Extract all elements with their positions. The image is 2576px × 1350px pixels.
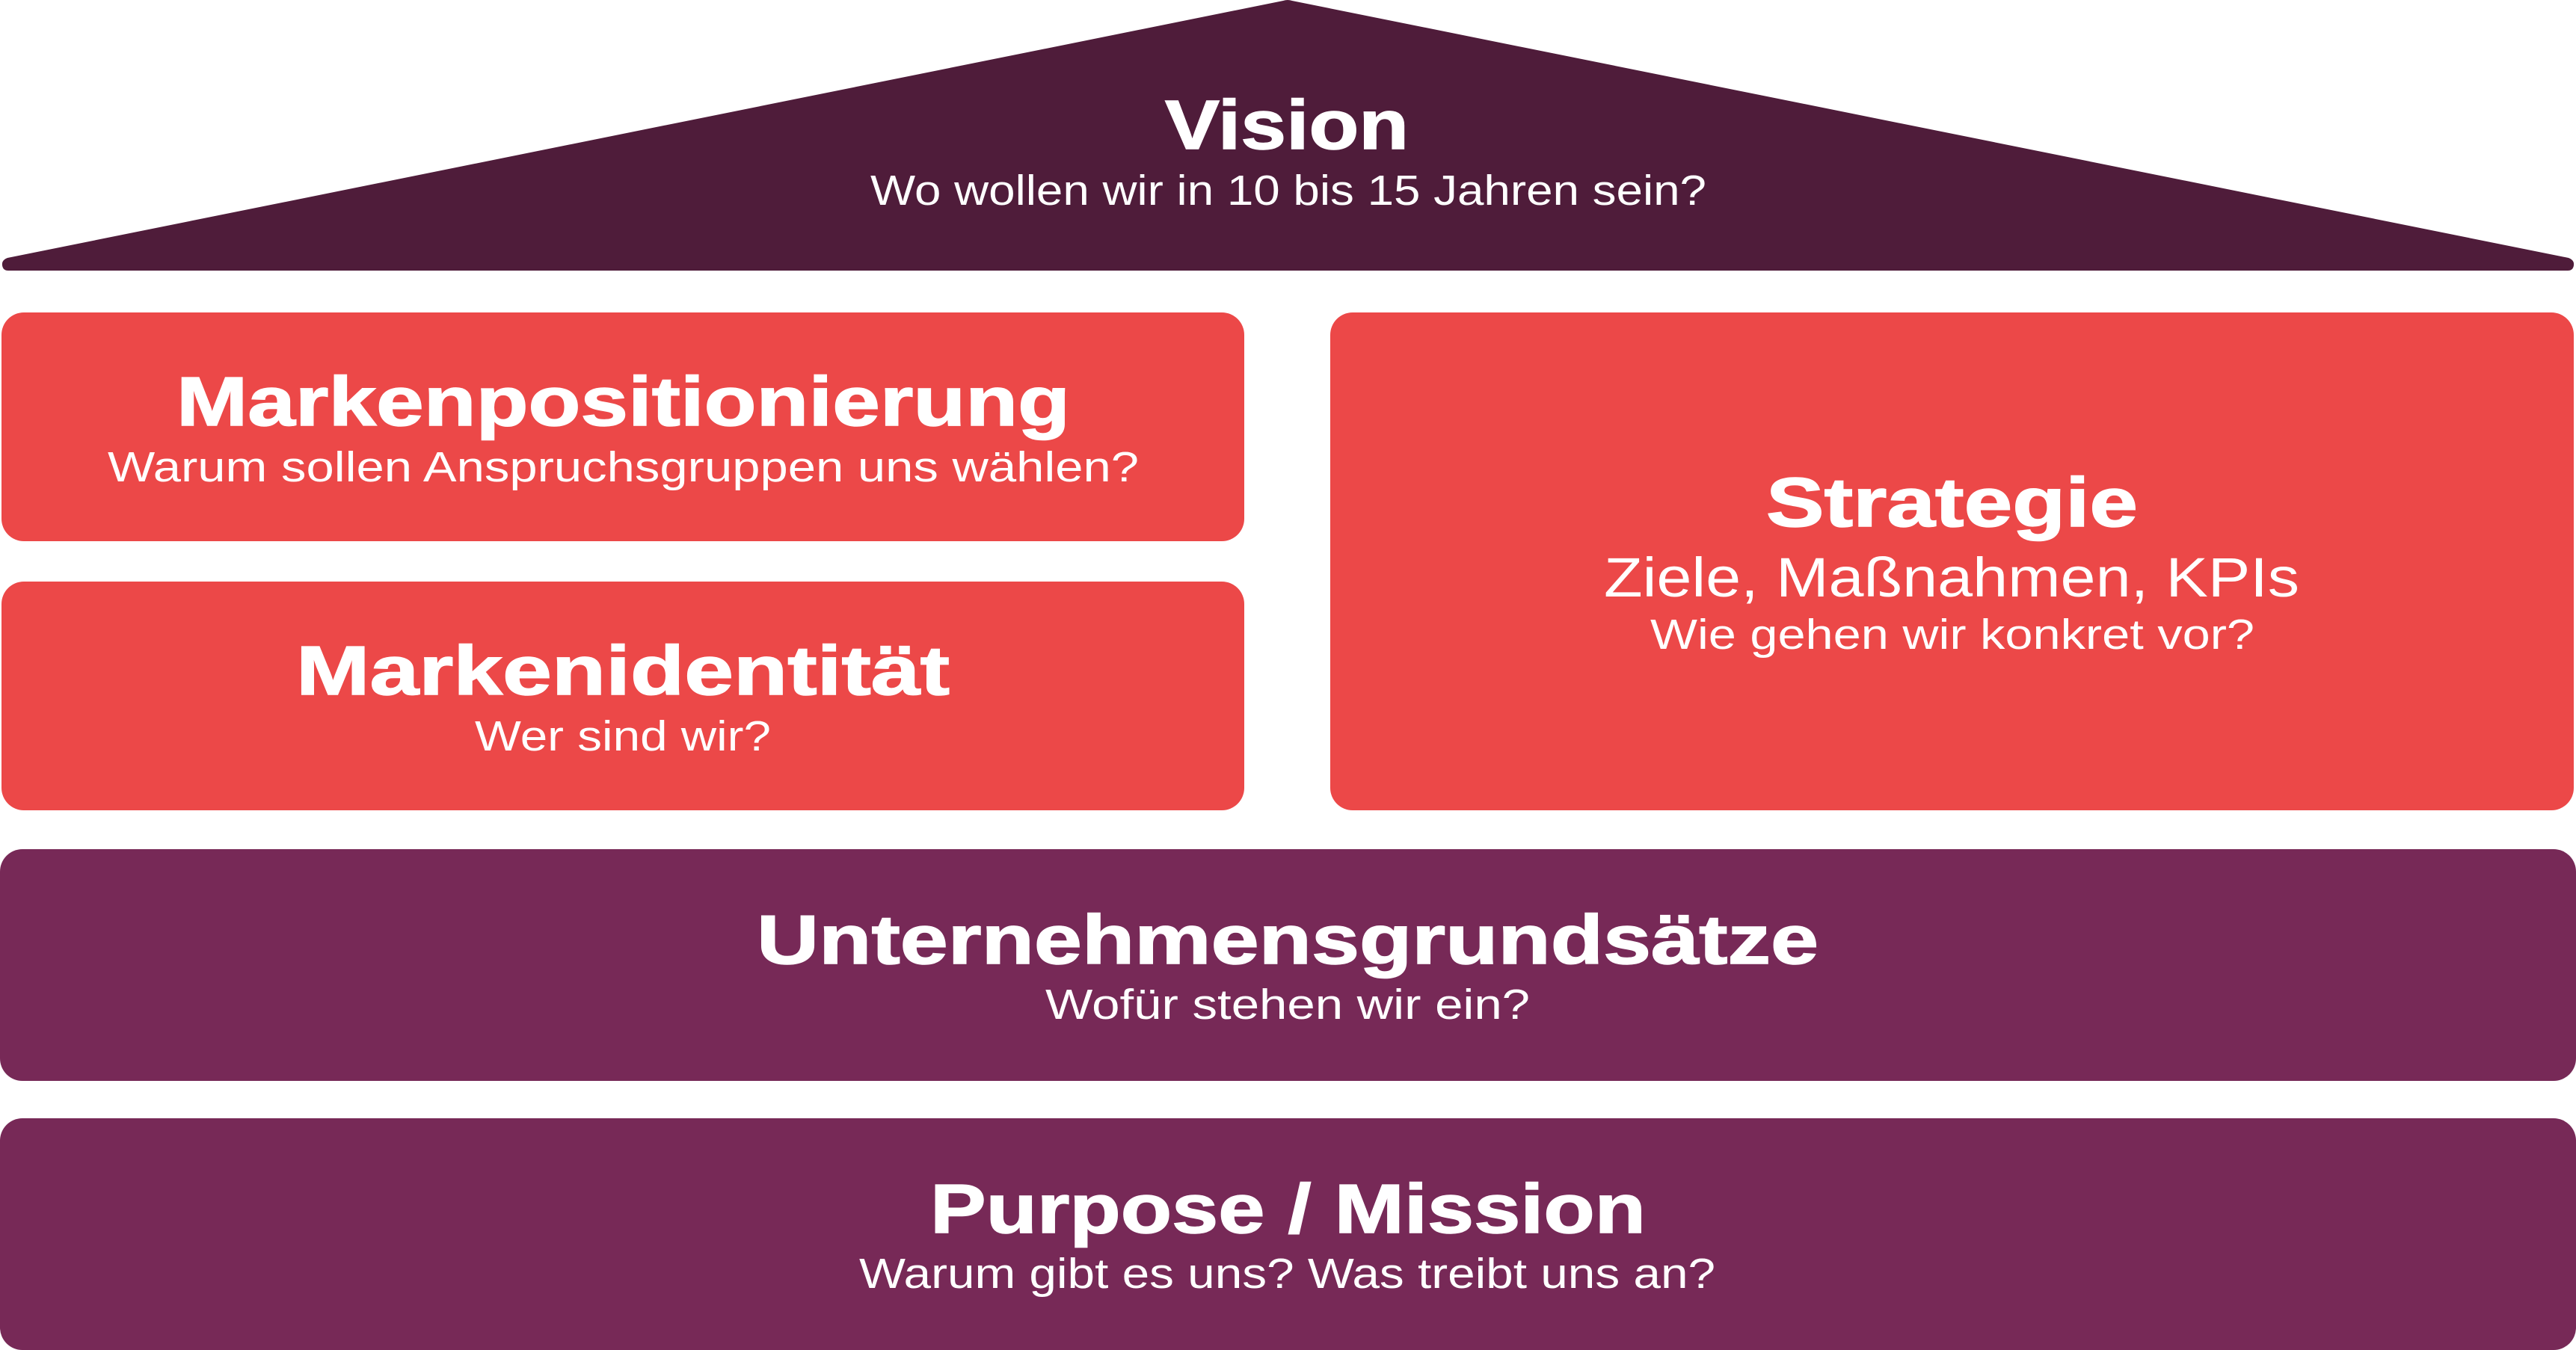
subtext: Purpose question: Warum gibt es uns? Was treibt uns an? [859, 1250, 1715, 1298]
heading: Markenidentität: Markenidentität [296, 632, 950, 709]
panel background [0, 849, 2576, 1081]
panel: Purpose / Mission [0, 1118, 2576, 1350]
heading: Markenpositionierung: Markenpositionierung [176, 363, 1070, 440]
heading: Purpose / Mission: Purpose / Mission [930, 1170, 1646, 1248]
panel background [1, 312, 1244, 541]
panel: Vision roof [2, 0, 2574, 271]
panel background [1330, 312, 2574, 810]
heading: Unternehmensgrundsätze: Unternehmensgrundsätze [757, 901, 1819, 978]
panel: Markenidentität [1, 582, 1244, 810]
panel background [0, 1118, 2576, 1350]
subtext: Unternehmensgrundsätze question: Wofür stehen wir ein? [1045, 981, 1530, 1029]
panel: Markenpositionierung [1, 312, 1244, 541]
subtext: Strategie question: Wie gehen wir konkret vor? [1650, 611, 2254, 659]
heading: Vision: Vision [1165, 86, 1409, 164]
subtext: Markenpositionierung question: Warum sollen Anspruchsgruppen uns wählen? [108, 443, 1139, 491]
subtext: Vision question: Wo wollen wir in 10 bis 15 Jahren sein? [870, 167, 1706, 215]
panel: Strategie [1330, 312, 2574, 810]
heading: Strategie: Strategie [1766, 463, 2138, 541]
roof triangle [2, 0, 2574, 271]
subtext: Markenidentität question: Wer sind wir? [475, 712, 771, 760]
panel background [1, 582, 1244, 810]
panel: Unternehmensgrundsätze [0, 849, 2576, 1081]
subheading: Ziele, Maßnahmen, KPIs: Ziele, Maßnahmen, KPIs [1604, 546, 2299, 608]
